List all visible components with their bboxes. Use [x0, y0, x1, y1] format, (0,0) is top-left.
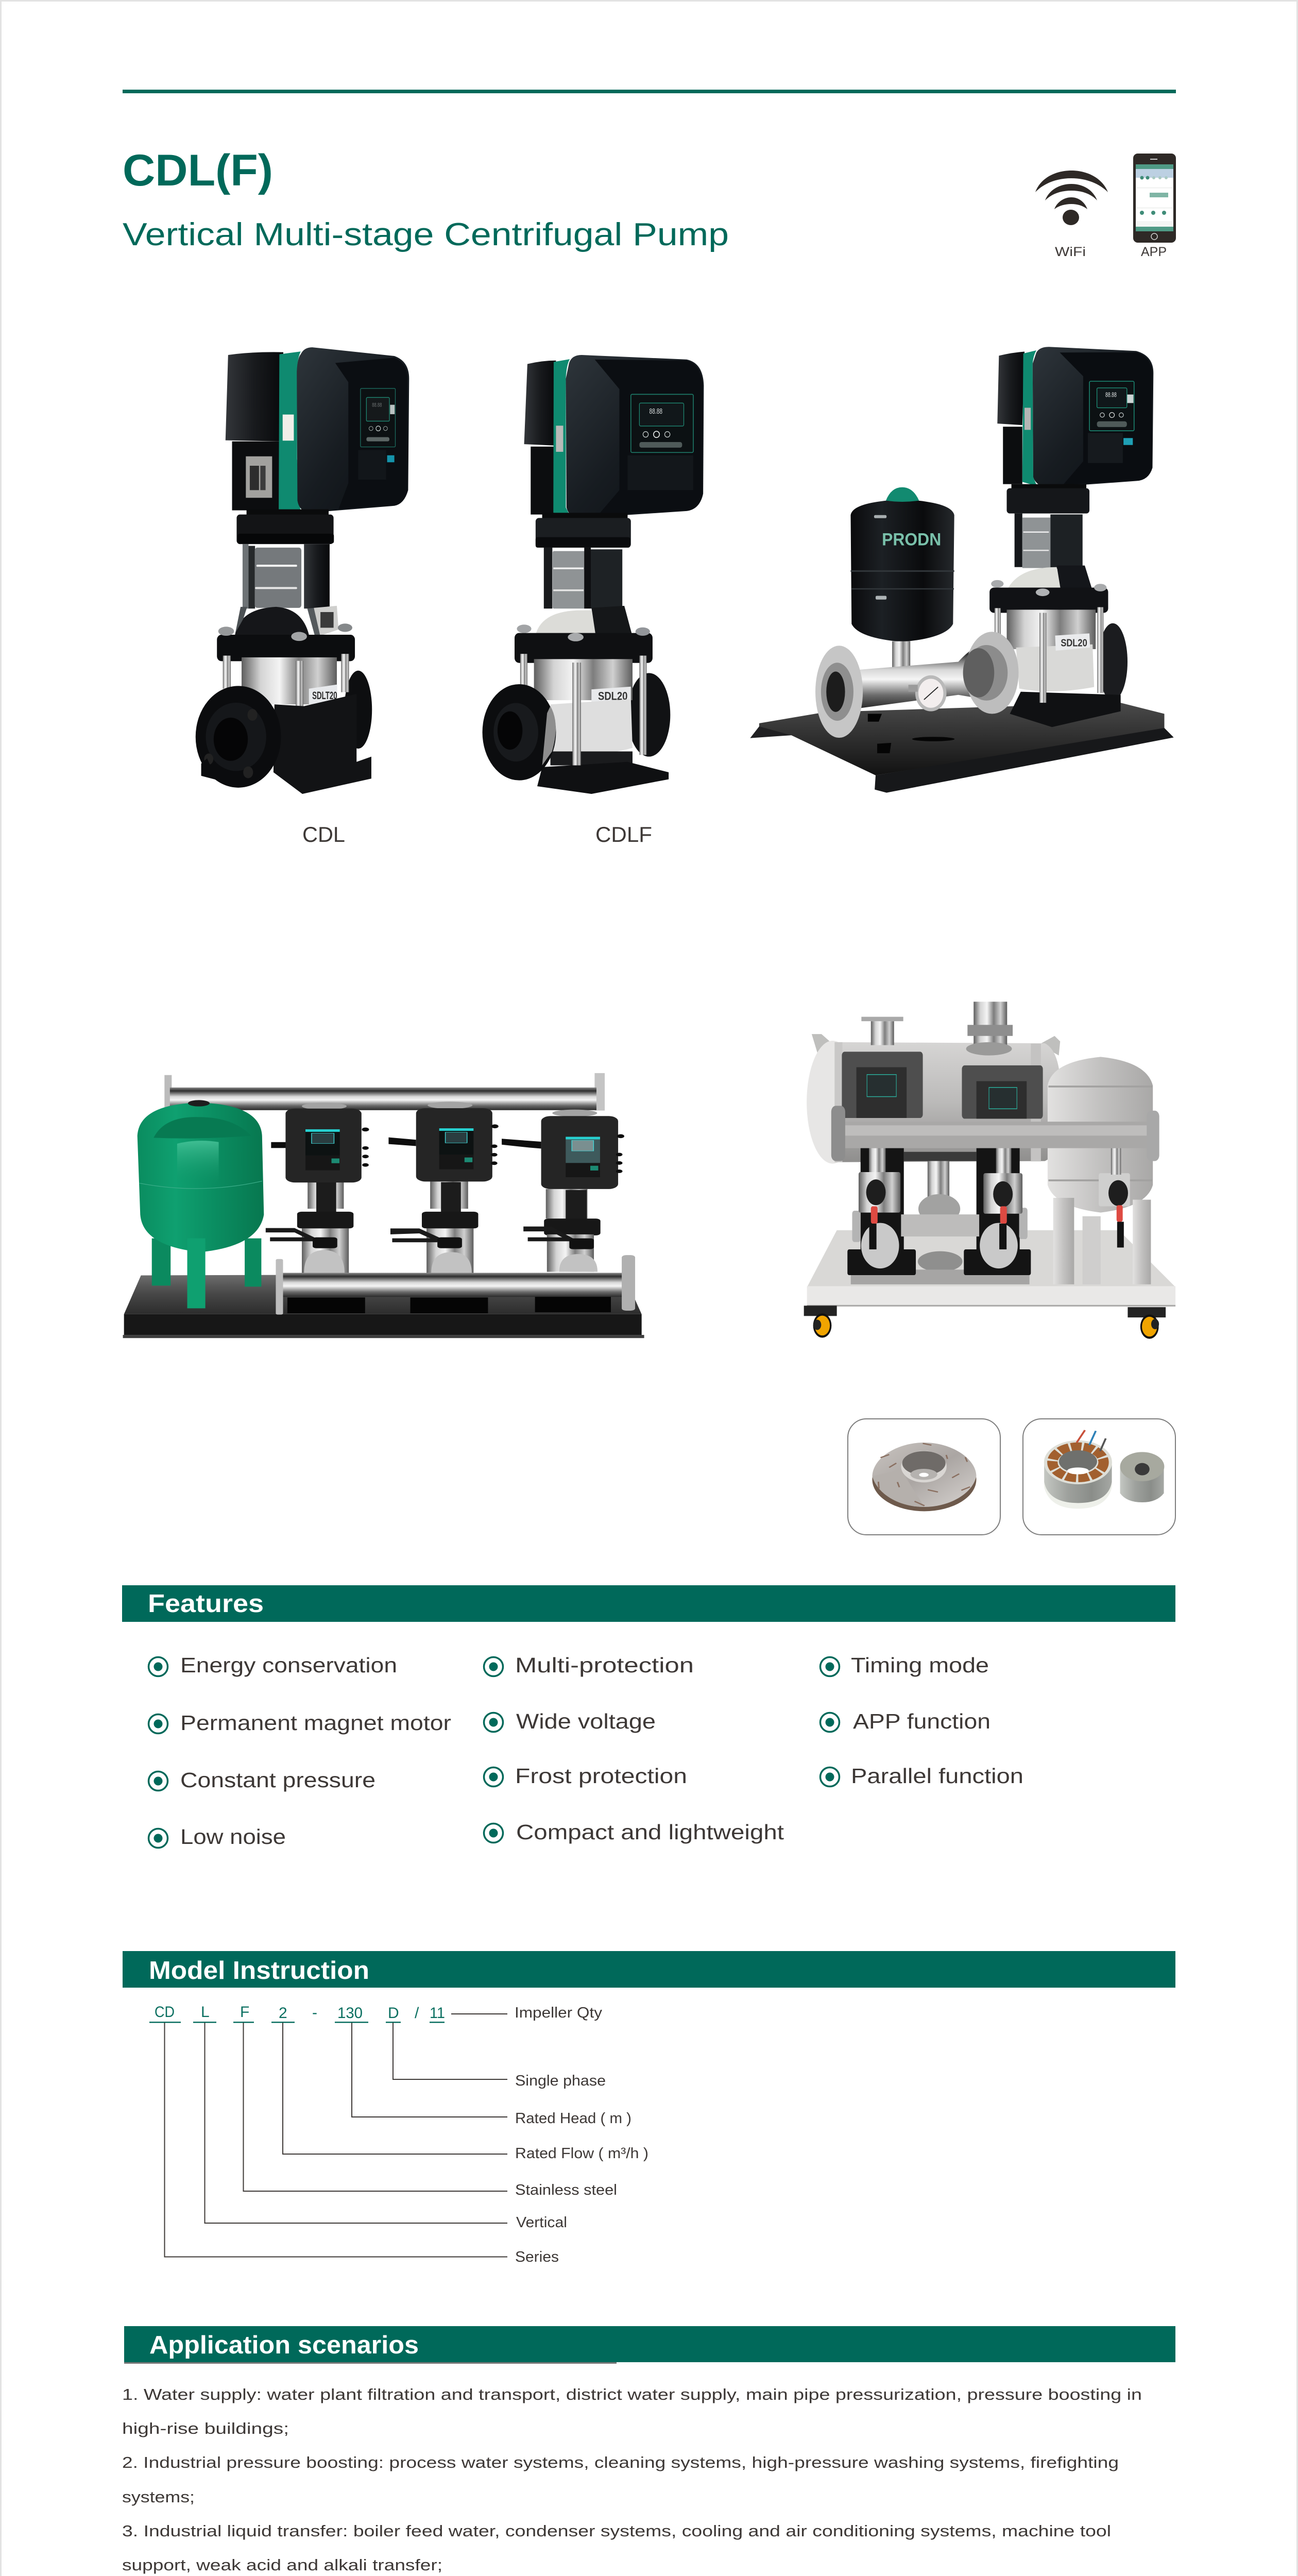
- model code letters: CD: [155, 2004, 175, 2021]
- product: CDL pump: SDLT20: [312, 690, 337, 702]
- application text: support, weak acid and alkali transfer;: [122, 2556, 442, 2574]
- application text: high-rise buildings;: [122, 2419, 289, 2437]
- app label: APP: [1141, 245, 1167, 259]
- heading bar: Model Instruction: Model Instruction: [149, 1957, 369, 1985]
- feature list: [148, 1653, 1023, 1849]
- application text: 3. Industrial liquid transfer: boiler feed water, condenser systems, cooling and air conditioning systems, machine tool: [122, 2522, 1111, 2540]
- leader lines: [165, 2014, 507, 2257]
- icon: phone app: [1133, 154, 1176, 243]
- product: CDLF pump: SDL20: [598, 689, 627, 703]
- product: pump with pressure tank on base plate: SDL20: [1061, 637, 1087, 649]
- model labels: Rated Head ( m ): [515, 2110, 631, 2127]
- heading bar: Features: [122, 1585, 1175, 1622]
- feature: Compact and lightweight: Compact and lightweight: [516, 1820, 784, 1844]
- model labels: Rated Flow ( m³/h ): [515, 2145, 648, 2162]
- model labels: Single phase: [515, 2073, 606, 2089]
- card: stator and rotor: [1023, 1419, 1175, 1535]
- feature: APP function: APP function: [853, 1709, 990, 1733]
- feature: Multi-protection: Multi-protection: [515, 1653, 694, 1677]
- model code letters: [149, 2004, 445, 2023]
- heading bar: Features: Features: [148, 1590, 264, 1618]
- model code letters: -: [312, 2004, 317, 2021]
- subtitle: Vertical Multi-stage Centrifugal Pump: [123, 217, 729, 252]
- application text: 1. Water supply: water plant filtration and transport, district water supply, main pipe pressurization, pressure boosting in: [122, 2385, 1142, 2403]
- product: pump with pressure tank on base plate: [750, 347, 1174, 793]
- heading bar: Model Instruction: [123, 1951, 1175, 1988]
- product: CDLF pump: [483, 355, 704, 794]
- feature: Energy conservation: Energy conservation: [180, 1653, 397, 1677]
- model code letters: 2: [279, 2005, 287, 2022]
- feature: Timing mode: Timing mode: [851, 1653, 989, 1677]
- feature: Constant pressure: Constant pressure: [180, 1768, 375, 1792]
- application text: [122, 2385, 1142, 2576]
- model code letters: 11: [430, 2005, 445, 2022]
- heading bar: Application scenarios: Application scenarios: [149, 2331, 419, 2359]
- feature: Multi-protection: [484, 1653, 694, 1677]
- feature: Permanent magnet motor: Permanent magnet motor: [180, 1711, 451, 1735]
- label: CDLF: CDLF: [595, 822, 652, 846]
- feature: Wide voltage: Wide voltage: [516, 1709, 656, 1733]
- product: CDL pump: 88.88: [372, 402, 382, 409]
- feature: Low noise: Low noise: [180, 1825, 286, 1849]
- model code letters: L: [201, 2004, 210, 2021]
- feature: Frost protection: Frost protection: [515, 1764, 687, 1788]
- card: impeller: [848, 1419, 1000, 1535]
- application text: systems;: [122, 2488, 195, 2506]
- model labels: Impeller Qty: [515, 2005, 603, 2021]
- product: stainless packaged pump station: [804, 1002, 1175, 1339]
- icon: wifi: [1035, 171, 1108, 225]
- model code letters: 130: [337, 2005, 363, 2022]
- feature: Low noise: [148, 1825, 286, 1849]
- model code diagram: [149, 2004, 648, 2265]
- application text: 2. Industrial pressure boosting: process water systems, cleaning systems, high-pressure washing systems, firefighting: [122, 2453, 1119, 2471]
- model code letters: F: [240, 2004, 249, 2021]
- product: CDLF pump: 88.88: [650, 408, 662, 416]
- title: CDL(F): [123, 146, 273, 195]
- heading bar: Application scenarios: [124, 2326, 1175, 2364]
- product: CDL pump: [196, 347, 409, 794]
- model code letters: /: [415, 2005, 419, 2022]
- label: CDL: CDL: [302, 822, 345, 846]
- model labels: Stainless steel: [515, 2182, 617, 2198]
- model labels: [515, 2005, 648, 2265]
- model labels: Series: [515, 2249, 559, 2265]
- top rule: [123, 90, 1176, 93]
- feature: Parallel function: Parallel function: [851, 1764, 1023, 1788]
- model code letters: D: [388, 2005, 399, 2022]
- product: three-pump booster set: [123, 1073, 644, 1338]
- product: pump with pressure tank on base plate: 88.88: [1105, 391, 1117, 399]
- wifi label: WiFi: [1055, 245, 1086, 259]
- product: pump with pressure tank on base plate: PRODN: [882, 530, 941, 550]
- model labels: Vertical: [516, 2214, 567, 2231]
